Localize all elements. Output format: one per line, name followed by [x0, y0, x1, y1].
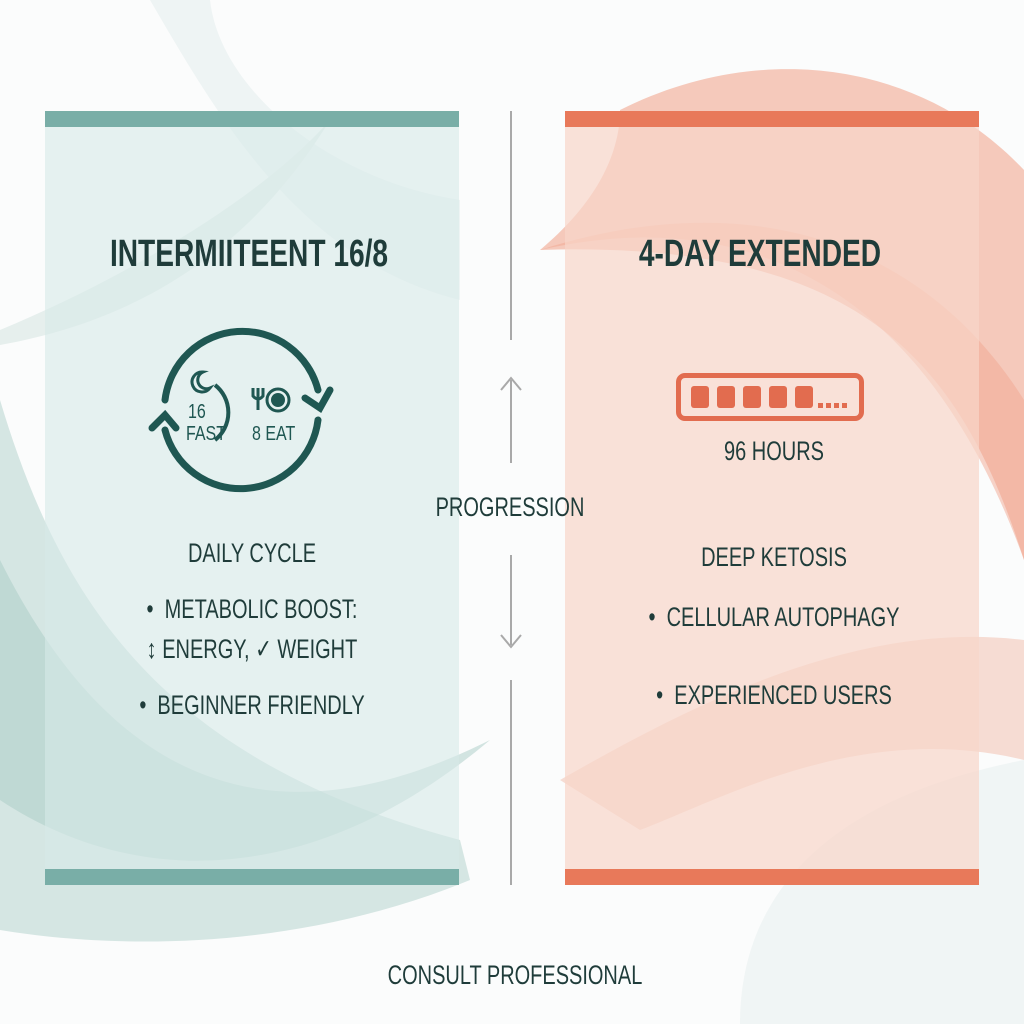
bullet: metabolic boost [147, 594, 357, 664]
panel: right extended [565, 111, 979, 885]
icon: 16/8 cycle [148, 328, 334, 492]
icon: battery 96 hours [676, 373, 864, 421]
label: progression: PROGRESSION [436, 492, 584, 522]
footer: consult professional: CONSULT PROFESSIONAL [388, 960, 642, 990]
bullet: beginner friendly: • BEGINNER FRIENDLY [139, 690, 365, 720]
icon: 16/8 cycle: 16 [188, 400, 206, 422]
bullet: experienced users: • EXPERIENCED USERS [656, 680, 892, 710]
bullet: metabolic boost: • METABOLIC BOOST: [147, 594, 357, 624]
text: deep ketosis: DEEP KETOSIS [701, 542, 847, 572]
heading: left: INTERMIITEENT 16/8 [110, 233, 388, 275]
divider with progression arrows [500, 111, 522, 885]
bullet: metabolic boost: ↕ ENERGY, ✓ WEIGHT [147, 634, 357, 664]
heading: right: 4-DAY EXTENDED [639, 233, 881, 275]
bullet: autophagy: • CELLULAR AUTOPHAGY [649, 602, 899, 632]
icon: 16/8 cycle: FAST [186, 422, 226, 444]
text: daily cycle: DAILY CYCLE [188, 538, 316, 568]
icon: 16/8 cycle: 8 EAT [252, 422, 295, 444]
panel: left intermittent [45, 111, 459, 885]
text: 96 hours: 96 HOURS [724, 436, 824, 466]
